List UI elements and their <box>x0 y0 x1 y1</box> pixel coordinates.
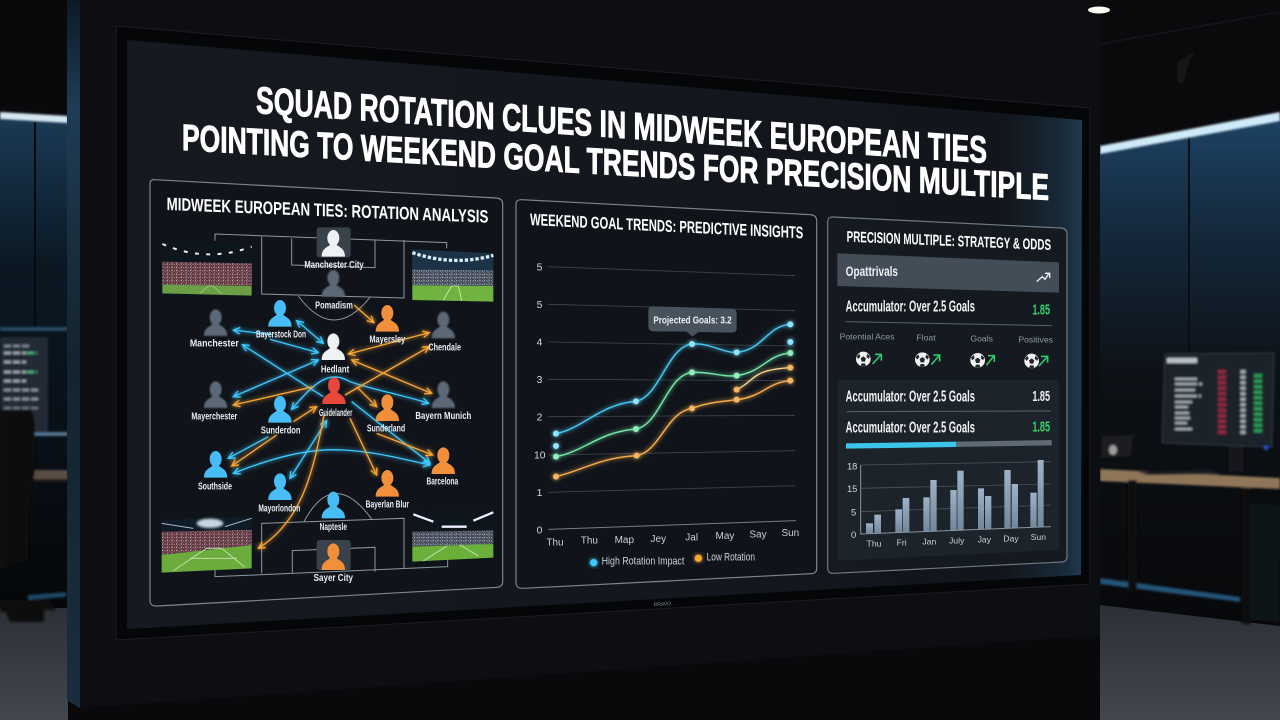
odds row 2: Accumulator: Over 2.5 Goals <box>846 389 975 406</box>
player labels: Bayern Munich <box>415 411 471 422</box>
player labels <box>190 260 471 584</box>
right background desk and monitor <box>1100 353 1280 624</box>
player labels: Manchester <box>190 339 239 350</box>
players faded <box>204 270 455 408</box>
icons: football with up arrow <box>856 352 1048 368</box>
line: medium rotation <box>553 350 793 460</box>
bar chart: Day <box>1003 533 1019 543</box>
stadium photo: bottom left <box>162 517 252 573</box>
bar chart: 0 <box>851 530 856 540</box>
player labels: Sunderdon <box>261 425 301 436</box>
odds value 2: 1.85 <box>1032 389 1050 405</box>
y axis labels: 3 <box>537 375 543 386</box>
bar chart <box>847 460 1051 549</box>
progress bar <box>846 440 1052 449</box>
wall pillar side face <box>67 0 80 708</box>
y axis labels: 1 <box>537 488 543 499</box>
stadium photo: top left <box>162 241 252 296</box>
bar chart: Thu <box>867 539 882 549</box>
panel heading: WEEKEND GOAL TRENDS: PREDICTIVE INSIGHTS <box>530 210 803 242</box>
y axis labels: 5 <box>537 262 543 273</box>
left background monitor and desk <box>0 327 68 622</box>
legend: Low Rotation <box>707 552 755 564</box>
options bar <box>837 253 1059 293</box>
panel heading: PRECISION MULTIPLE: STRATEGY & ODDS <box>847 229 1051 254</box>
blue arrows <box>228 321 430 478</box>
tooltip: Projected Goals: 3.2 <box>653 316 732 327</box>
x axis labels: Thu <box>581 536 598 547</box>
odds row 1: Accumulator: Over 2.5 Goals <box>846 298 975 315</box>
player labels: Bayerstock Don <box>256 329 306 340</box>
bar chart: July <box>949 535 965 545</box>
player labels: Chendale <box>428 343 461 354</box>
bar chart: 18 <box>847 461 857 471</box>
panel heading: MIDWEEK EUROPEAN TIES: ROTATION ANALYSIS <box>167 194 488 227</box>
screen <box>127 40 1082 629</box>
bar chart: 5 <box>851 507 856 517</box>
player labels: Hedlant <box>321 365 350 376</box>
player labels: Mayersley <box>369 334 406 345</box>
line: low rotation <box>553 365 793 480</box>
y axis labels: 4 <box>537 337 543 348</box>
player labels: Sunderland <box>367 424 405 435</box>
odds row 3: Accumulator: Over 2.5 Goals <box>846 419 975 436</box>
odds row 1: 1.85 <box>1032 302 1050 318</box>
factor labels: Float <box>916 332 936 342</box>
y axis labels <box>534 262 546 537</box>
player labels: Mayorlondon <box>258 503 300 514</box>
ceiling spotlight <box>1088 6 1110 14</box>
y axis labels: 2 <box>537 413 543 424</box>
y axis labels: 0 <box>537 526 543 537</box>
factor labels: Positives <box>1018 335 1054 345</box>
factor labels <box>840 331 1054 345</box>
factor labels: Goals <box>970 334 994 344</box>
odds subpanel <box>838 379 1059 561</box>
odds value 3: 1.85 <box>1032 419 1050 435</box>
factor labels: Potential Aces <box>840 331 895 341</box>
odds row 1 <box>846 298 1052 326</box>
player labels: Naptesle <box>320 522 347 533</box>
wall front <box>80 0 1100 708</box>
players white <box>322 230 345 360</box>
legend <box>590 552 755 568</box>
x axis labels: Map <box>615 535 634 546</box>
x axis labels: Sun <box>781 528 799 539</box>
x axis labels: Thu <box>546 537 564 548</box>
player labels: Guidelander <box>319 408 352 419</box>
bar chart: Fri <box>897 537 907 547</box>
left light strip <box>0 112 68 123</box>
x axis labels: May <box>716 531 734 542</box>
y axis labels: 5 <box>537 300 543 311</box>
legend: High Rotation Impact <box>602 556 684 568</box>
orange arrows <box>232 305 433 548</box>
player labels: Manchester City <box>304 260 364 271</box>
player red <box>322 377 346 404</box>
panel: weekend goal trends <box>516 200 817 588</box>
x axis labels <box>546 528 799 548</box>
bar chart: 15 <box>847 484 857 494</box>
bar chart: Sun <box>1031 532 1046 542</box>
bezel brand label: BRAVO <box>654 601 671 608</box>
player labels: Pomadism <box>315 301 353 312</box>
main title: SQUAD ROTATION CLUES IN MIDWEEK EUROPEAN TIES <box>256 80 987 172</box>
right light strip <box>1100 112 1280 154</box>
stadium photo: top right <box>412 249 493 302</box>
player labels: Barcelona <box>426 476 459 487</box>
main title <box>182 80 1049 208</box>
players blue <box>204 300 345 518</box>
x axis labels: Jal <box>685 532 698 543</box>
panel: precision multiple <box>828 217 1067 573</box>
y axis labels: 10 <box>534 451 546 462</box>
icon: trend arrow <box>1037 273 1050 282</box>
screen frame <box>116 26 1090 640</box>
grid lines <box>548 267 796 529</box>
x axis labels: Jey <box>651 534 666 545</box>
player labels: Sayer City <box>314 573 354 584</box>
line: high rotation <box>553 321 793 449</box>
pitch markings <box>215 234 448 577</box>
bar chart: Jay <box>978 534 992 544</box>
bar chart: Jan <box>922 536 936 546</box>
player labels: Bayerlan Blur <box>366 500 409 511</box>
stadium photo: bottom right <box>412 511 493 562</box>
player boxes <box>317 227 351 570</box>
x axis labels: Say <box>749 530 767 541</box>
panel: midweek rotation analysis <box>150 180 503 606</box>
options bar: Opattrivals <box>846 263 898 279</box>
player labels: Mayerchester <box>191 411 237 422</box>
players orange <box>322 305 455 570</box>
player labels: Southside <box>198 481 232 492</box>
tooltip <box>648 306 737 337</box>
